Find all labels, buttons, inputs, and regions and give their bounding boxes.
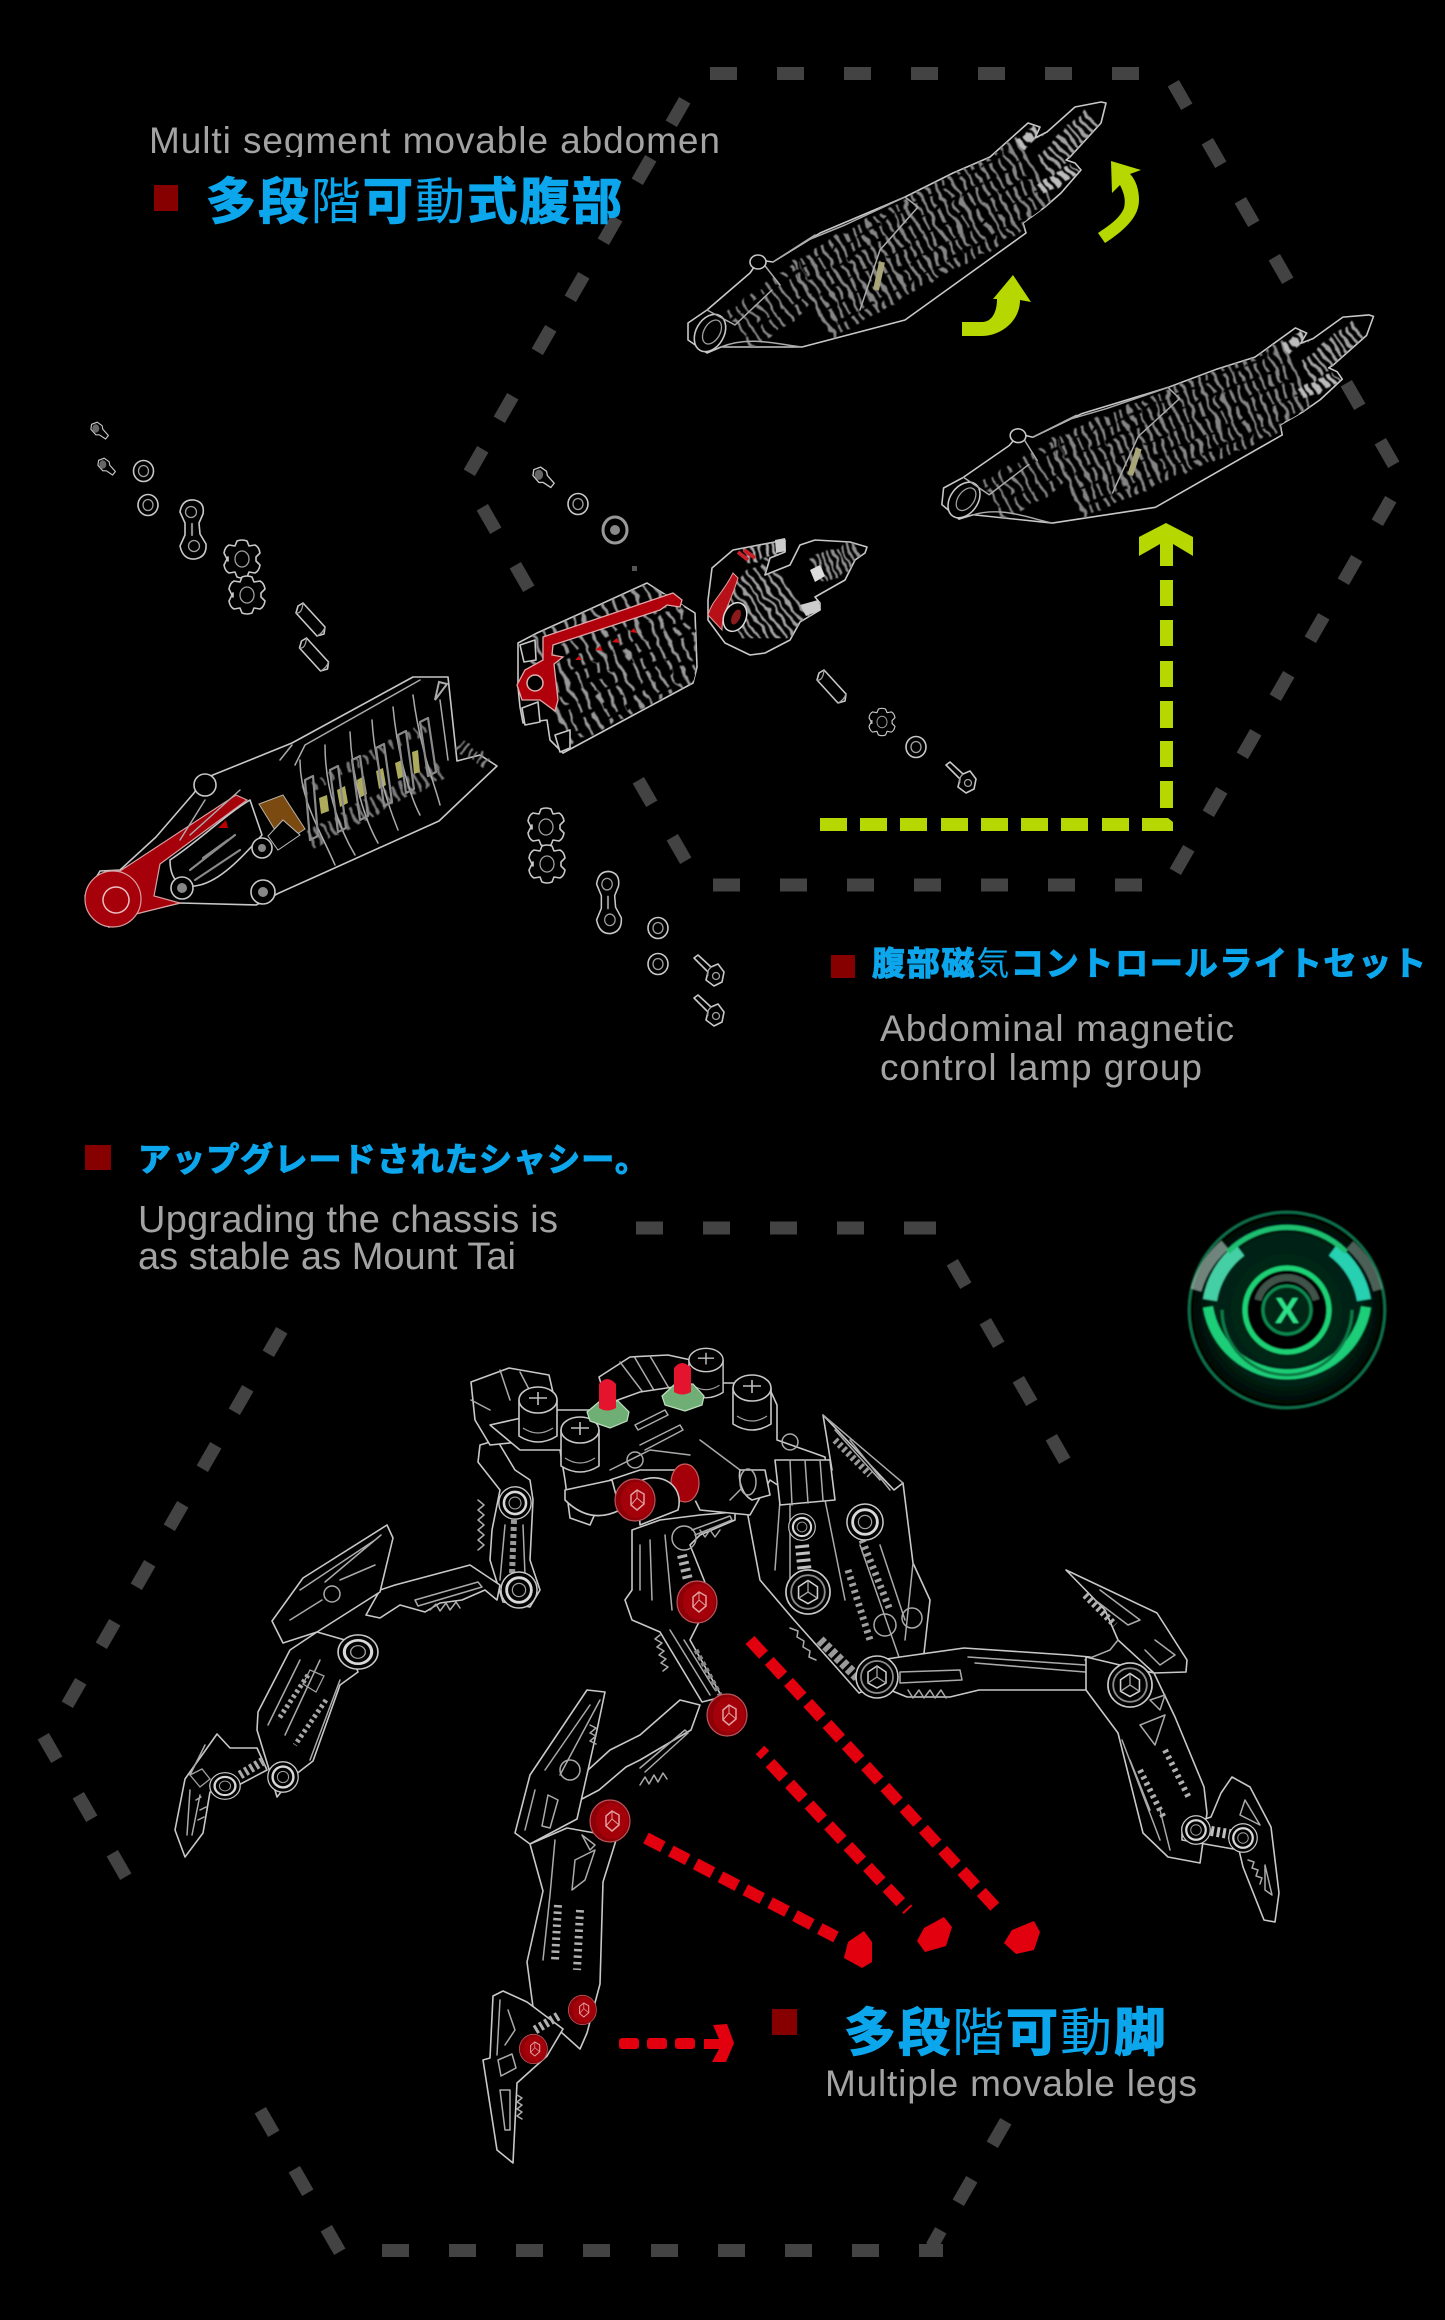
robot: right leg <box>745 1415 1279 1922</box>
small parts: lower gears, link, washers and bolts <box>528 808 724 1026</box>
lower upper pincer <box>515 1690 605 1844</box>
shin <box>257 1632 358 1797</box>
label: abdominal magnetic control lamp group: Abdominal magnetic <box>880 1008 1234 1049</box>
foot <box>175 1734 267 1857</box>
hexagon frame: abdomen section <box>469 74 1394 885</box>
label: upgraded chassis: アップグレードされたシャシー。 <box>138 1141 648 1178</box>
small parts: right cylinder, gear, washer and bolt <box>817 670 976 793</box>
heading: multi segment movable abdomen: 多段階可動式腹部 <box>206 174 622 230</box>
label: upgraded chassis <box>85 1141 648 1278</box>
exploded part: rear abdomen segment <box>85 677 497 927</box>
robot: center leg <box>483 1512 747 2163</box>
left barrel joint <box>471 1368 557 1445</box>
heading: multi segment movable abdomen: Multi segment movable abdomen <box>149 120 720 161</box>
label: abdominal magnetic control lamp group <box>831 945 1426 1088</box>
green hex nuts <box>587 1401 629 1428</box>
small parts: middle screw, washer and disk <box>533 467 637 571</box>
icon: glowing green X button: X <box>1275 1290 1299 1331</box>
upper barrel <box>599 1355 691 1410</box>
cap screws <box>519 1387 557 1442</box>
thigh <box>880 1648 1090 1697</box>
label: upgraded chassis: Upgrading the chassis is <box>138 1199 558 1241</box>
label: upgraded chassis: as stable as Mount Tai <box>138 1236 516 1278</box>
lower foot <box>483 1991 563 2163</box>
arrow: dashed lime elbow arrow <box>820 523 1193 831</box>
arrow: red dashed arrow to legs, near <box>646 1838 872 1968</box>
exploded part: middle abdomen segment with red bracket <box>517 583 697 753</box>
abdomen assembly, flexed position <box>688 102 1106 357</box>
arrow: curved lime arrow lower <box>962 275 1031 336</box>
arrow: red dashed arrow from foot <box>619 2024 734 2062</box>
arrow: curved lime arrow upper <box>1098 161 1141 243</box>
knee assembly <box>745 1415 930 1693</box>
abdomen assembly, straight position <box>940 273 1374 564</box>
icon: glowing green X button <box>1189 1212 1385 1408</box>
hexagon frame: chassis section <box>43 1228 1065 2252</box>
plate <box>490 1383 829 1525</box>
robot: left leg <box>175 1440 540 1857</box>
lower shin <box>527 1828 617 2049</box>
arrow: red dashed arrow to legs, far <box>750 1640 1040 1954</box>
small parts: left screws, washers, links and gears <box>91 422 329 671</box>
label: multiple movable legs: 多段階可動脚 <box>844 2005 1166 2063</box>
shin <box>1086 1657 1207 1863</box>
label: abdominal magnetic control lamp group: 腹部磁気コントロールライトセット <box>872 945 1426 982</box>
heading: multi segment movable abdomen <box>152 126 718 225</box>
foot <box>1182 1777 1279 1922</box>
arrow: red dashed arrow to legs, middle <box>760 1750 952 1952</box>
label: multiple movable legs <box>772 2005 1197 2104</box>
red posts <box>599 1379 616 1410</box>
label: multiple movable legs: Multiple movable legs <box>825 2063 1197 2104</box>
thigh <box>366 1565 500 1618</box>
upper pincer <box>272 1525 393 1643</box>
exploded part: abdomen tail with three prongs <box>708 538 867 655</box>
label: abdominal magnetic control lamp group: control lamp group <box>880 1047 1202 1088</box>
red joint bolts <box>677 1581 717 1623</box>
upper claw <box>1066 1570 1187 1673</box>
lower link <box>580 1700 700 1800</box>
robot: chassis torso with screws <box>471 1348 835 1525</box>
red shoulder bolts <box>672 1467 700 1505</box>
